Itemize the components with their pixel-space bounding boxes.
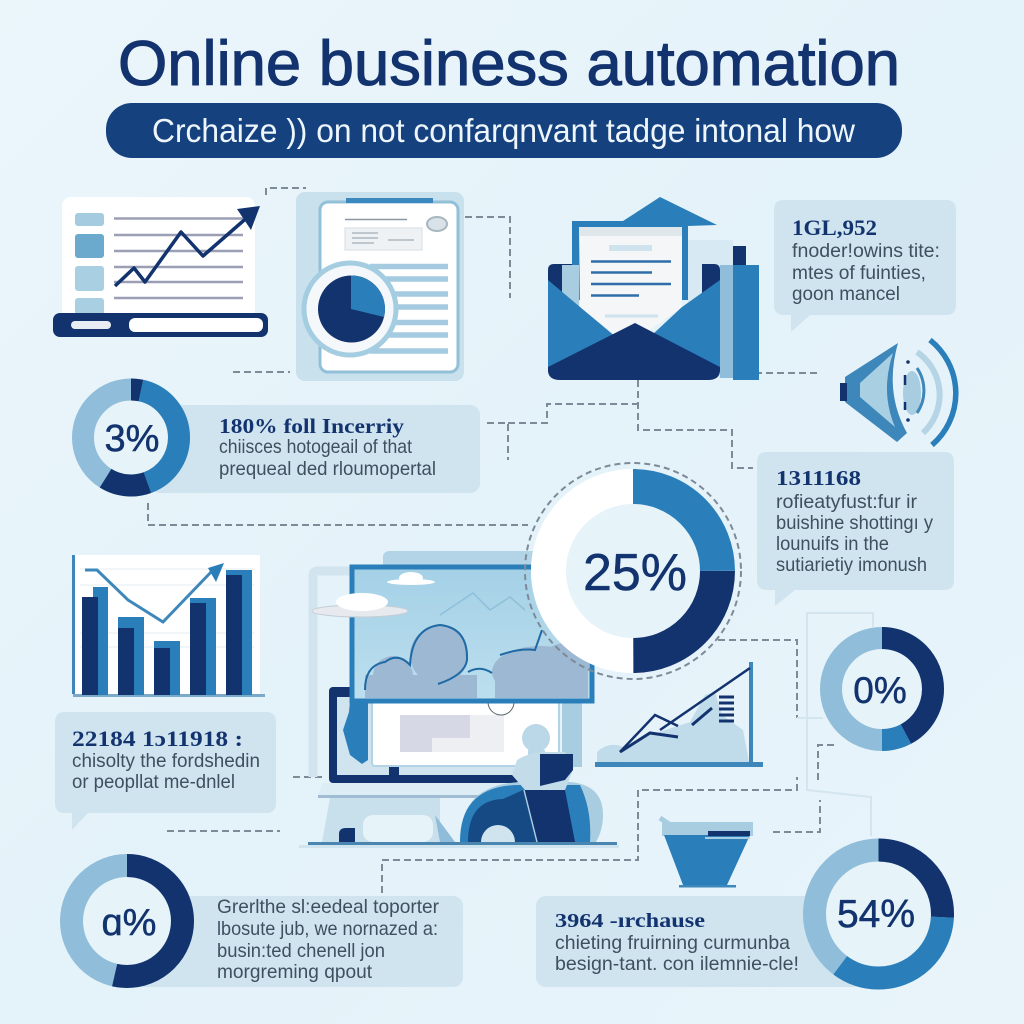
icon: laptop with rising line chart	[53, 197, 268, 337]
donut: 3% with text panel: 180% foll Incerriy	[219, 414, 405, 438]
callout: 1311168: sutiarietiy imonush	[776, 554, 927, 576]
bar chart with trend arrow	[72, 555, 265, 697]
donut: 9% with text panel	[72, 866, 463, 987]
donut: 9% with text panel: ɑ%	[102, 902, 156, 944]
title: Online business automation	[118, 29, 900, 99]
callout: 1311168: 1311168	[776, 466, 861, 490]
subtitle banner: Crchaize )) on not confarqnvant tadge intonal how	[152, 112, 855, 149]
connector lines	[148, 188, 873, 893]
donut: 9% with text panel: morgreming qpout	[217, 961, 373, 983]
donut: 0%	[831, 638, 933, 740]
donut: 3% with text panel	[83, 390, 480, 493]
callout: 22184: 22184 1ɔ11918 :	[72, 726, 243, 751]
donut: 54% with text panel	[536, 850, 942, 987]
icon: speaker with sound waves	[840, 340, 956, 445]
donut: 25%	[525, 463, 741, 679]
callout: 22184: chisolty the fordshedin	[72, 750, 260, 772]
donut: 3% with text panel: 3%	[105, 418, 159, 460]
callout: 1GL,952: fnoder!owins tite:	[792, 240, 940, 262]
callout: 1GL,952	[774, 200, 956, 332]
callout: 1GL,952: mtes of fuinties,	[792, 262, 926, 284]
subtitle banner	[106, 103, 902, 158]
callout: 1311168	[757, 452, 954, 606]
icon: open envelope with letter	[548, 197, 759, 380]
icon: document with pie chart	[296, 192, 464, 381]
callout: 1311168: buishine shottingı y	[776, 512, 933, 534]
donut: 0%: 0%	[853, 670, 907, 711]
donut: 54% with text panel: besign-tant. con ilemnie-cle!	[555, 953, 799, 975]
donut: 3% with text panel: chiisces hotogeail of that	[219, 436, 413, 458]
callout: 1GL,952: goon mancel	[792, 283, 900, 305]
donut: 25%: 25%	[583, 544, 687, 602]
callout: 1GL,952: 1GL,952	[792, 215, 877, 240]
icon: mountain line chart	[595, 662, 763, 767]
central illustration: monitor, cloud picture and person	[299, 551, 619, 848]
callout: 22184: or peopllat me-dnlel	[72, 771, 235, 793]
icon: funnel	[660, 818, 753, 888]
callout: 1311168: rofieatyfust:fur ir	[776, 491, 918, 513]
donut: 3% with text panel: prequeal ded rloumopertal	[219, 458, 436, 480]
donut: 54% with text panel: 54%	[837, 893, 915, 936]
donut: 54% with text panel: 3964 -ırchause	[555, 910, 705, 932]
donut: 9% with text panel: Grerlthe sl:eedeal toporter	[217, 896, 439, 918]
callout: 1311168: lounuifs in the	[776, 533, 889, 555]
donut: 9% with text panel: lbosute jub, we nornazed a:	[217, 918, 438, 940]
donut: 54% with text panel: chieting fruirning curmunba	[555, 932, 790, 954]
callout: 22184	[55, 712, 276, 830]
donut: 9% with text panel: busin:ted chenell jon	[217, 940, 385, 962]
